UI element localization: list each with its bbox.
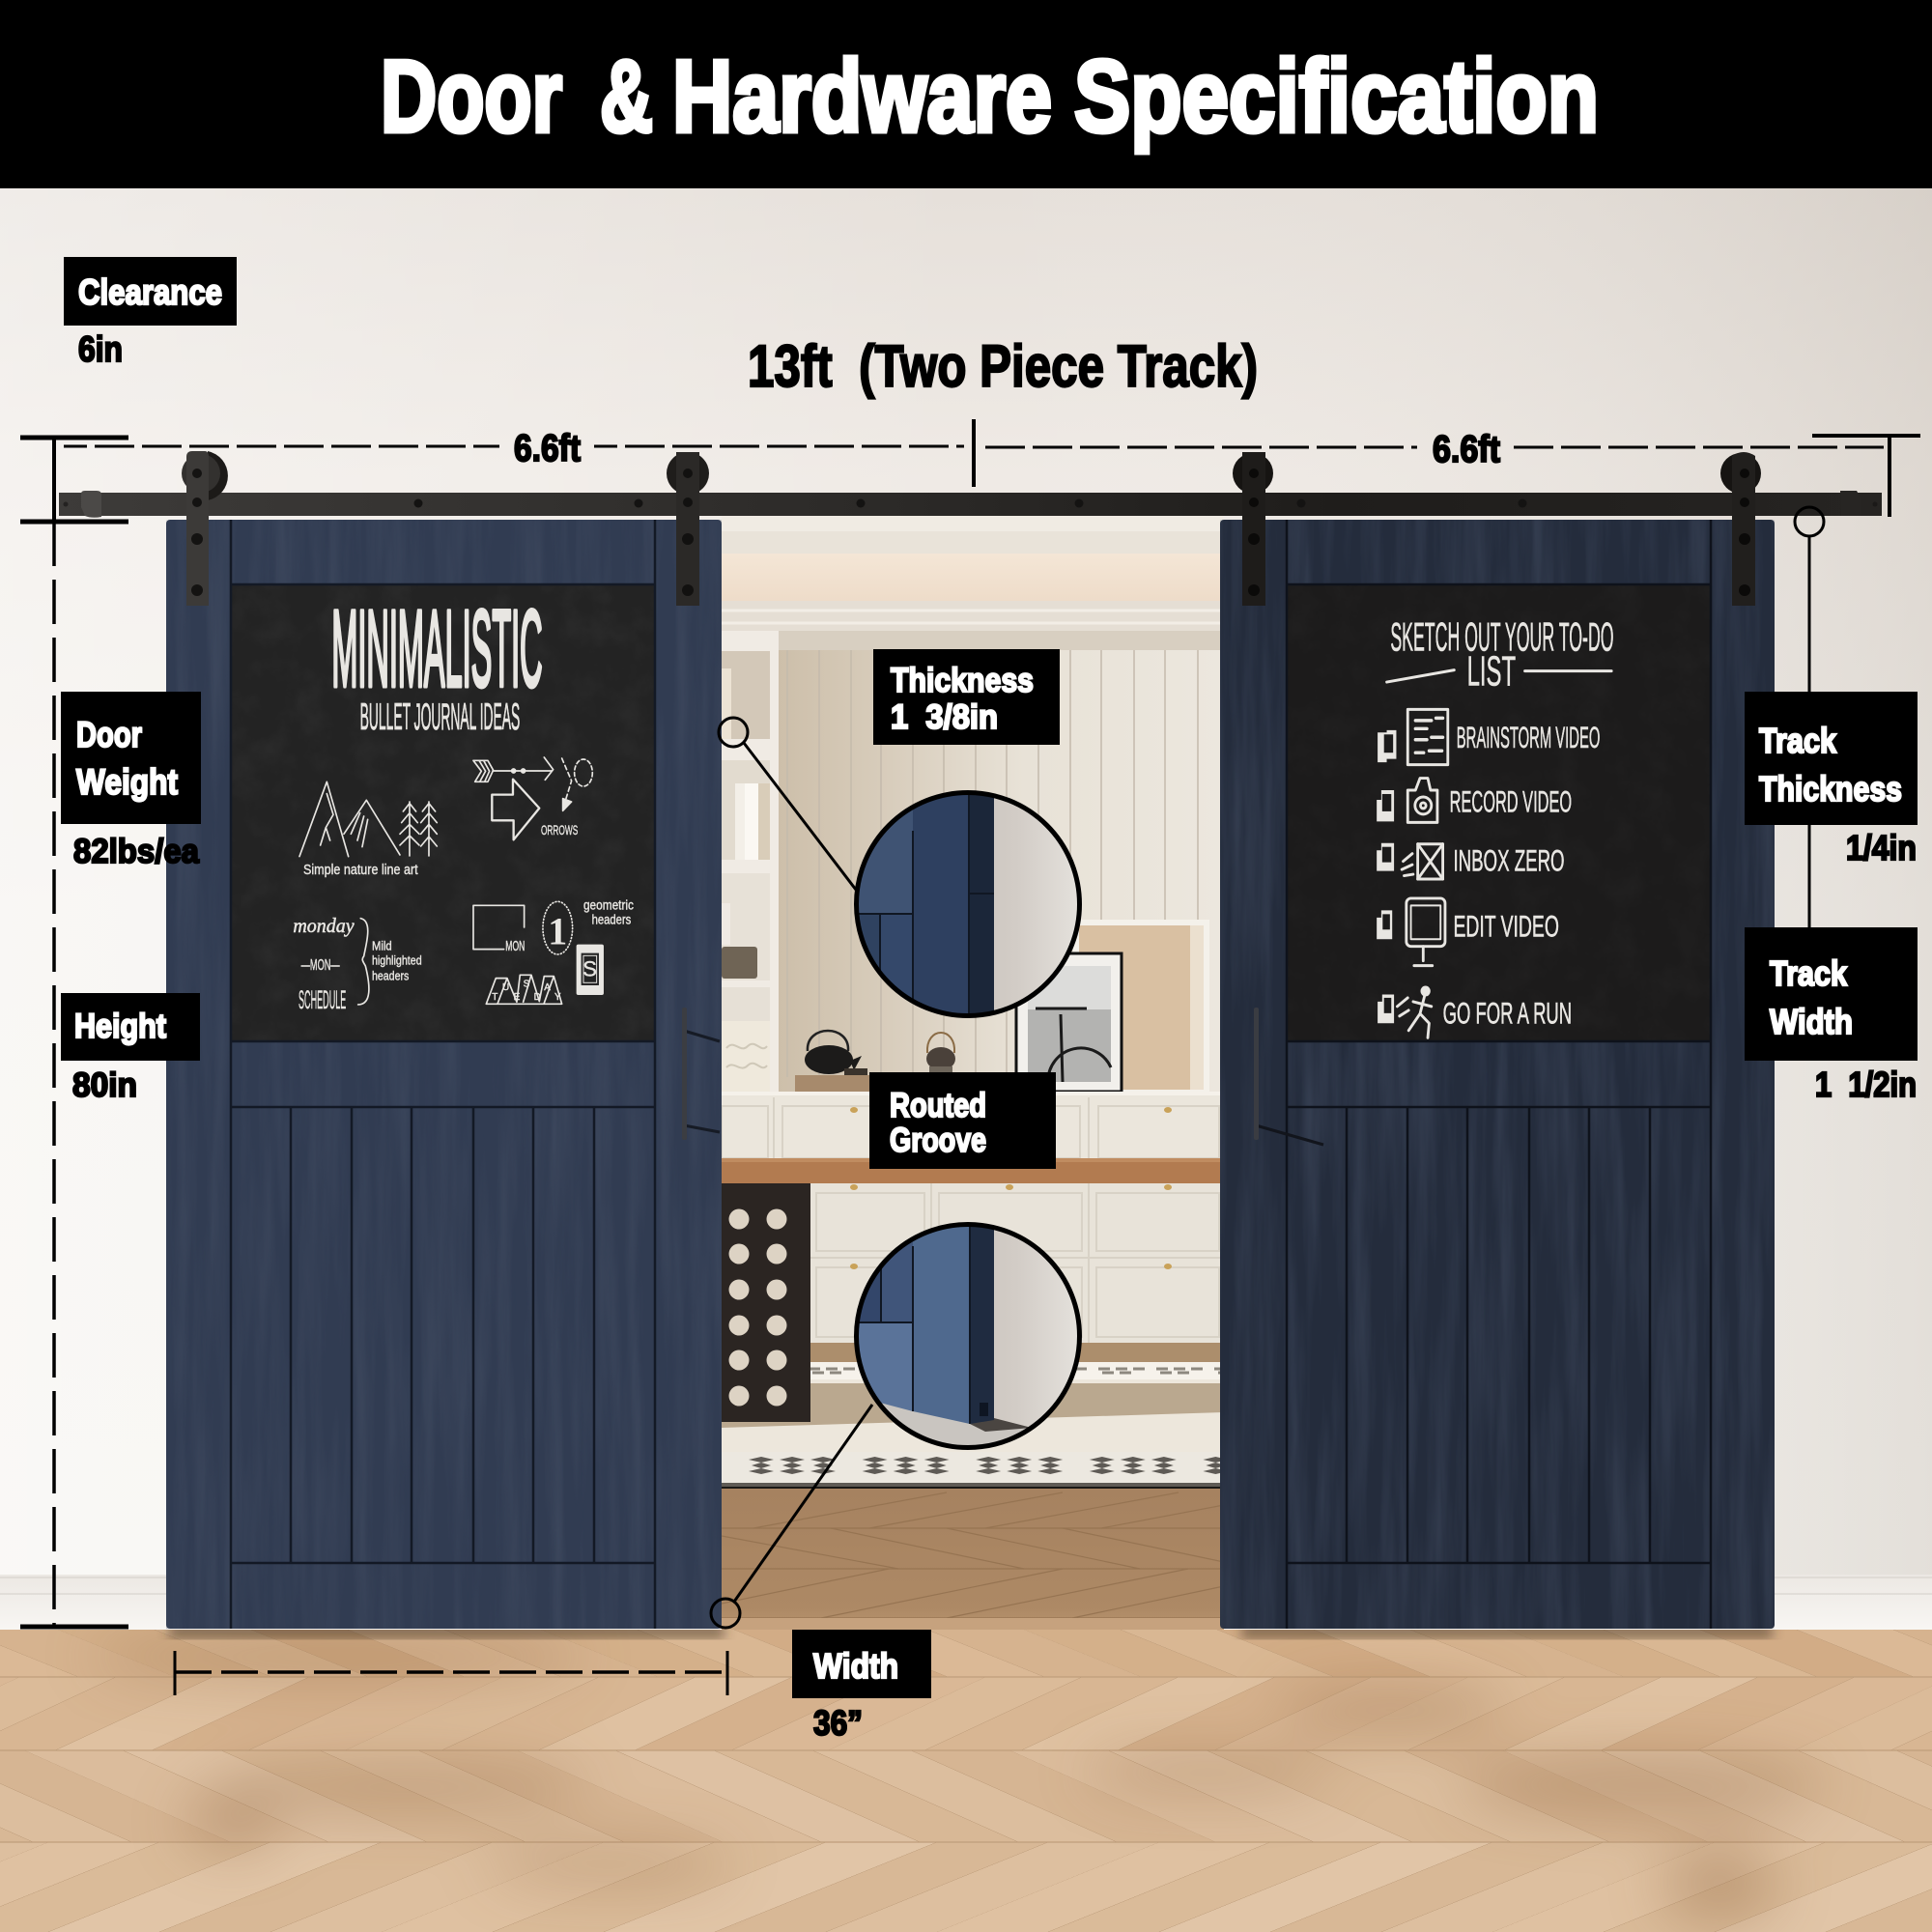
right track dimension bbox=[985, 446, 1884, 448]
title: Door bbox=[381, 40, 562, 154]
label: track width: Track bbox=[1770, 953, 1848, 993]
herringbone wood floor bbox=[0, 1625, 1932, 1932]
label: door thickness bbox=[873, 649, 1060, 745]
chalkboard panel: to-do list: RECORD VIDEO bbox=[1450, 784, 1572, 819]
chalkboard panel: to-do list: GO FOR A RUN bbox=[1443, 996, 1572, 1030]
chalkboard panel: minimalistic bullet journal: geometric bbox=[583, 897, 634, 913]
chalkboard panel: to-do list bbox=[1287, 584, 1711, 1041]
track length heading: 13ft (Two Piece Track) bbox=[748, 333, 1258, 399]
chalkboard panel: minimalistic bullet journal: monday bbox=[293, 916, 355, 937]
hanger strap right door left bbox=[1233, 452, 1273, 606]
door frame seams and rails bbox=[1287, 520, 1711, 1629]
hanger strap right door right bbox=[1720, 452, 1761, 606]
left barn door: MINIMALISTIC bbox=[331, 588, 543, 709]
label: door weight: 82lbs/ea bbox=[73, 833, 200, 870]
title: & bbox=[600, 40, 653, 154]
label: track width: Width bbox=[1770, 1002, 1853, 1041]
label: routed groove: Groove bbox=[890, 1122, 986, 1159]
door height dimension bbox=[20, 522, 128, 1627]
label: clearance: Clearance bbox=[78, 272, 222, 312]
label: track width: 1 1/2in bbox=[1815, 1065, 1917, 1104]
patterned rug bbox=[722, 1343, 1224, 1489]
chalkboard panel: minimalistic bullet journal bbox=[231, 584, 655, 1041]
label: width bbox=[792, 1630, 931, 1743]
chalkboard panel: minimalistic bullet journal: ORROWS bbox=[541, 822, 578, 838]
wood countertop bbox=[722, 1158, 1224, 1183]
chalkboard panel: minimalistic bullet journal: headers bbox=[372, 968, 410, 982]
view through the opening: room interior bbox=[722, 516, 1224, 1630]
label: height bbox=[61, 993, 200, 1104]
chalkboard panel: minimalistic bullet journal: 1 bbox=[548, 909, 567, 952]
label: track thickness bbox=[1745, 692, 1918, 867]
lower cabinets bbox=[810, 1183, 1224, 1343]
kettles and tray bbox=[795, 1031, 955, 1092]
title: Hardware bbox=[672, 40, 1052, 154]
ceiling and cove light bbox=[722, 516, 1224, 631]
magnifier: door thickness detail bbox=[854, 790, 1086, 1022]
label: door thickness: 1 3/8in bbox=[891, 698, 998, 736]
upper cabinets bbox=[722, 1092, 1224, 1158]
track end stoppers bbox=[81, 491, 1861, 518]
label: track thickness: Thickness bbox=[1759, 769, 1902, 809]
perforated black panel bbox=[722, 1183, 810, 1422]
label: track thickness: 1/4in bbox=[1846, 828, 1917, 867]
dimension lines bbox=[20, 419, 1920, 1695]
chalkboard panel: minimalistic bullet journal: SCHEDULE bbox=[298, 985, 346, 1014]
door width dimension bbox=[175, 1651, 727, 1695]
label: track thickness: Track bbox=[1759, 721, 1837, 760]
label: door thickness: Thickness bbox=[891, 662, 1034, 699]
chalkboard panel: to-do list: LIST bbox=[1467, 648, 1516, 696]
right end bracket bbox=[1812, 436, 1920, 517]
chalkboard panel: minimalistic bullet journal: S bbox=[582, 957, 597, 981]
callout leader lines bbox=[711, 507, 1824, 1628]
label: door weight: Weight bbox=[76, 762, 178, 802]
door pull handle bbox=[682, 1008, 720, 1140]
clearance bracket bbox=[20, 438, 128, 522]
right barn door bbox=[1220, 520, 1775, 1629]
label: door weight: Door bbox=[76, 715, 142, 754]
centre tick bbox=[972, 419, 976, 487]
label: width: 36” bbox=[813, 1703, 863, 1743]
label: track width bbox=[1745, 927, 1918, 1104]
label: door weight bbox=[61, 692, 201, 870]
chalkboard panel: minimalistic bullet journal: —MON— bbox=[301, 957, 340, 974]
door pull handle bbox=[1254, 1008, 1323, 1145]
chalkboard panel: minimalistic bullet journal: Simple nature line art bbox=[303, 863, 418, 878]
left barn door bbox=[166, 520, 722, 1629]
label: routed groove bbox=[869, 1072, 1056, 1169]
label: clearance bbox=[64, 257, 237, 369]
chalkboard panel: minimalistic bullet journal: highlighted bbox=[372, 952, 422, 967]
chalkboard panel: minimalistic bullet journal: BULLET JOURNAL IDEAS bbox=[360, 696, 520, 738]
framed art bbox=[1016, 920, 1209, 1092]
title bbox=[381, 40, 1599, 154]
chalkboard panel: minimalistic bullet journal: headers bbox=[592, 912, 631, 927]
steel track rail bbox=[59, 493, 1882, 516]
baseboard bbox=[0, 1575, 1932, 1630]
label: width: Width bbox=[813, 1646, 898, 1686]
barn door track and hardware bbox=[59, 451, 1882, 606]
chalkboard panel: to-do list: BRAINSTORM VIDEO bbox=[1457, 720, 1600, 754]
label: clearance: 6in bbox=[78, 329, 123, 369]
magnifier: routed groove detail bbox=[854, 1222, 1086, 1454]
label: routed groove: Routed bbox=[890, 1087, 986, 1124]
paneled back wall bbox=[779, 631, 1224, 1095]
label: height: Height bbox=[74, 1008, 166, 1045]
chalkboard panel: to-do list: SKETCH OUT YOUR TO-DO bbox=[1390, 614, 1614, 660]
title banner bbox=[0, 0, 1932, 188]
chalkboard panel: minimalistic bullet journal: Mild bbox=[372, 938, 392, 952]
title: Specification bbox=[1074, 40, 1599, 154]
bookshelf bbox=[722, 631, 779, 1095]
label: height: 80in bbox=[72, 1066, 137, 1104]
door frame seams and rails bbox=[231, 520, 655, 1629]
hanger strap left door right bbox=[667, 452, 709, 606]
chalkboard panel: to-do list: INBOX ZERO bbox=[1453, 843, 1565, 878]
left track dimension bbox=[64, 444, 964, 448]
left section length: 6.6ft bbox=[514, 428, 581, 469]
chalkboard panel: minimalistic bullet journal: TUESDAY bbox=[492, 980, 561, 1003]
chalkboard panel: minimalistic bullet journal: MON bbox=[505, 939, 525, 954]
chalkboard panel: to-do list: EDIT VIDEO bbox=[1453, 909, 1559, 944]
right section length: 6.6ft bbox=[1433, 429, 1500, 470]
wall background bbox=[0, 188, 1932, 1633]
room wood floor bbox=[722, 1489, 1224, 1630]
hanger strap left door left bbox=[182, 451, 228, 606]
